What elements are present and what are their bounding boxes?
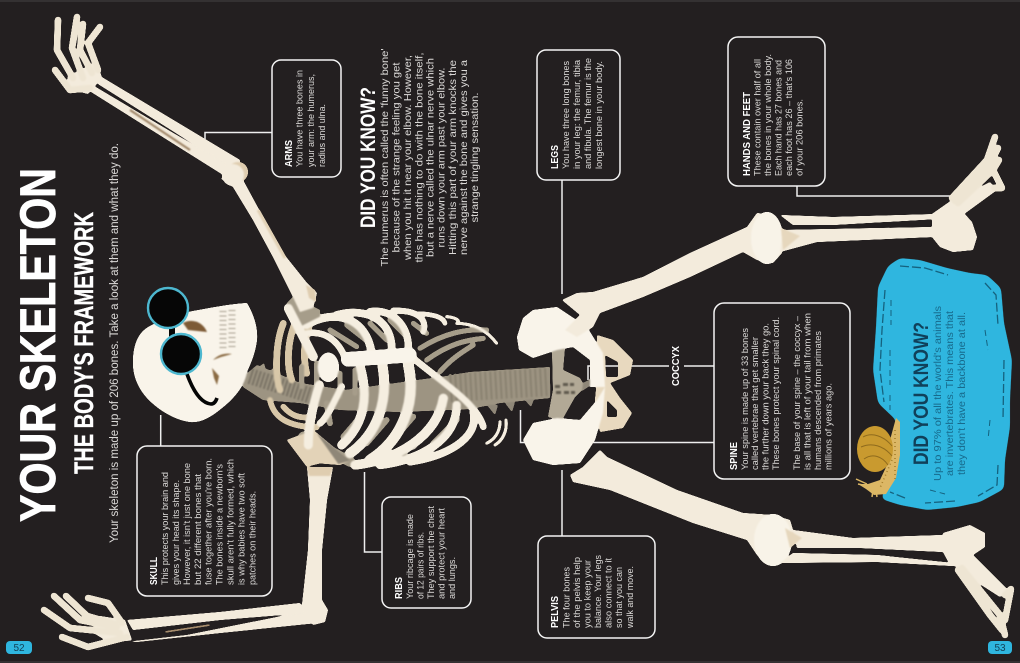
label: legs box: You have three long bones — [561, 61, 571, 169]
label: arms box: ARMS — [283, 140, 295, 167]
label: arms box: You have three bones in — [294, 70, 304, 167]
label: ribs box: They support the chest — [426, 506, 436, 599]
subtitle: THE BODY'S FRAMEWORK — [69, 212, 99, 474]
label: hands and feet box: of your 206 bones. — [794, 99, 804, 176]
did you know: funny bone: because of the strange feeling you get — [392, 62, 402, 252]
page number 53: 53 — [994, 643, 1006, 654]
connector lines — [161, 132, 950, 552]
label: skull box: skull aren't fully formed, which — [226, 459, 236, 585]
label: skull box — [137, 446, 272, 596]
page number 52: 52 — [13, 643, 25, 654]
did you know: funny bone: runs down your arm past your elbow. — [436, 68, 448, 248]
label: hands and feet box: These contain over half of all — [752, 59, 762, 176]
label: hands and feet box: HANDS AND FEET — [741, 91, 753, 176]
label: ribs box: and lungs. — [447, 557, 457, 599]
lower leg — [570, 450, 1011, 635]
label: spine box: called vertebrae that get smaller — [750, 337, 760, 470]
blob heading: Up to 97% of all the world's animals — [932, 306, 944, 481]
label: ribs box: RIBS — [393, 577, 405, 599]
label: skull box: gives your head its shape. — [171, 480, 181, 585]
did you know: funny bone: but a nerve called the ulnar nerve which — [426, 58, 436, 257]
sunglasses — [148, 288, 217, 404]
skull — [133, 303, 257, 422]
label: pelvis box: PELVIS — [549, 596, 561, 628]
did you know: funny bone: this has nothing to do with the bone itself, — [414, 52, 426, 262]
title: YOUR SKELETON — [10, 168, 66, 522]
label: spine box: humans descended from primates — [813, 331, 823, 470]
did you know: funny bone — [357, 48, 481, 266]
label: pelvis box: The four bones — [562, 567, 572, 628]
did you know: funny bone: when you hit it near your elbow. However, — [403, 55, 414, 261]
label: legs box: longest bone in your body. — [594, 61, 604, 169]
label: legs box: LEGS — [549, 145, 561, 169]
label: skull box: fuse together after you're born. — [204, 458, 214, 585]
raised arm — [55, 17, 317, 312]
label: ribs box: Your ribcage is made — [405, 514, 415, 599]
label: spine box: These bones protect your spinal cord. — [771, 317, 781, 470]
foot — [932, 137, 1002, 252]
did you know: funny bone: DID YOU KNOW? — [357, 87, 380, 228]
spine — [243, 363, 550, 415]
label: spine box: the further down your back they go. — [760, 323, 770, 470]
label: spine box: SPINE — [728, 442, 740, 470]
label: skull box: but 22 different bones that — [193, 474, 203, 585]
label: arms box: radius and ulna. — [317, 104, 327, 167]
hand — [44, 596, 132, 647]
label: hands and feet box: each foot has 26 – that's 106 — [784, 59, 794, 176]
front ribs — [307, 311, 506, 465]
blob heading: DID YOU KNOW? — [910, 322, 933, 465]
label: skull box: However, it isn't just one bone — [182, 463, 192, 585]
did you know: funny bone: Hitting this part of your arm knocks the — [448, 59, 459, 255]
label: ribs box: of 12 pairs of ribs. — [416, 532, 426, 599]
panel: blue did you know blob — [873, 258, 1012, 510]
hand — [55, 17, 102, 94]
label: skull box: The bones inside a newborn's — [214, 464, 224, 585]
label: hands and feet box — [728, 37, 825, 186]
label: ribs box: and protect your heart — [436, 508, 446, 599]
blob heading: are invertebrates. This means that — [944, 311, 956, 476]
label: spine box: is all that is left of your tail from when — [802, 313, 812, 470]
label: ribs box — [382, 497, 471, 608]
blob heading: they don't have a backbone at all. — [956, 312, 968, 475]
label: spine box: millions of years ago. — [824, 383, 834, 470]
back ribs — [270, 320, 487, 462]
did you know: funny bone: nerve against the bone and gives you a — [459, 60, 470, 255]
icon: snail — [856, 418, 900, 497]
label: arms box: your arm: the humerus, — [306, 74, 316, 167]
label: pelvis box: so that you can — [614, 567, 624, 628]
label: skull box: patches on their heads. — [248, 491, 258, 585]
label: pelvis box: you to keep your — [582, 560, 592, 628]
page number 52 — [6, 641, 32, 654]
label: spine box — [714, 303, 850, 479]
label: pelvis box — [538, 536, 655, 638]
label: skull box: SKULL — [148, 557, 160, 585]
label: hands and feet box: Each hand has 27 bones and — [774, 60, 784, 176]
blob heading — [910, 306, 968, 481]
pelvis — [517, 307, 633, 465]
label: legs box — [537, 50, 620, 180]
scapula — [287, 430, 350, 467]
label: pelvis box: balance. Your legs — [593, 555, 603, 628]
ribcage — [270, 297, 506, 467]
foot — [943, 525, 1011, 635]
label: spine box: Your spine is made up of 33 bones — [740, 328, 750, 470]
label: legs box: in your leg: the femur, tibia — [572, 59, 582, 169]
clavicles and sternum — [288, 308, 313, 357]
page number 53 — [988, 641, 1012, 654]
label: hands and feet box: the bones in your whole body. — [763, 54, 773, 176]
label: coccyx: COCCYX — [670, 346, 682, 386]
label: pelvis box: also connect to it — [604, 558, 614, 628]
lowered arm — [44, 467, 333, 647]
label: skull box: is why babies have two soft — [236, 473, 246, 585]
intro text: Your skeleton is made up of 206 bones. Take a look at them and what they do. — [107, 143, 121, 543]
label: pelvis box: of the pelvis help — [572, 557, 582, 628]
did you know: funny bone: strange tingling sensation. — [470, 92, 481, 222]
label: pelvis box: walk and move. — [625, 566, 635, 629]
label: spine box: The base of your spine – the coccyx – — [792, 315, 802, 470]
label: arms box — [272, 60, 341, 177]
label: legs box: and fibula. The femur is the — [583, 58, 593, 169]
label: skull box: This protects your brain and — [160, 472, 170, 585]
upper leg — [562, 137, 1002, 337]
did you know: funny bone: The humerus is often called the 'funny bone' — [380, 48, 391, 267]
